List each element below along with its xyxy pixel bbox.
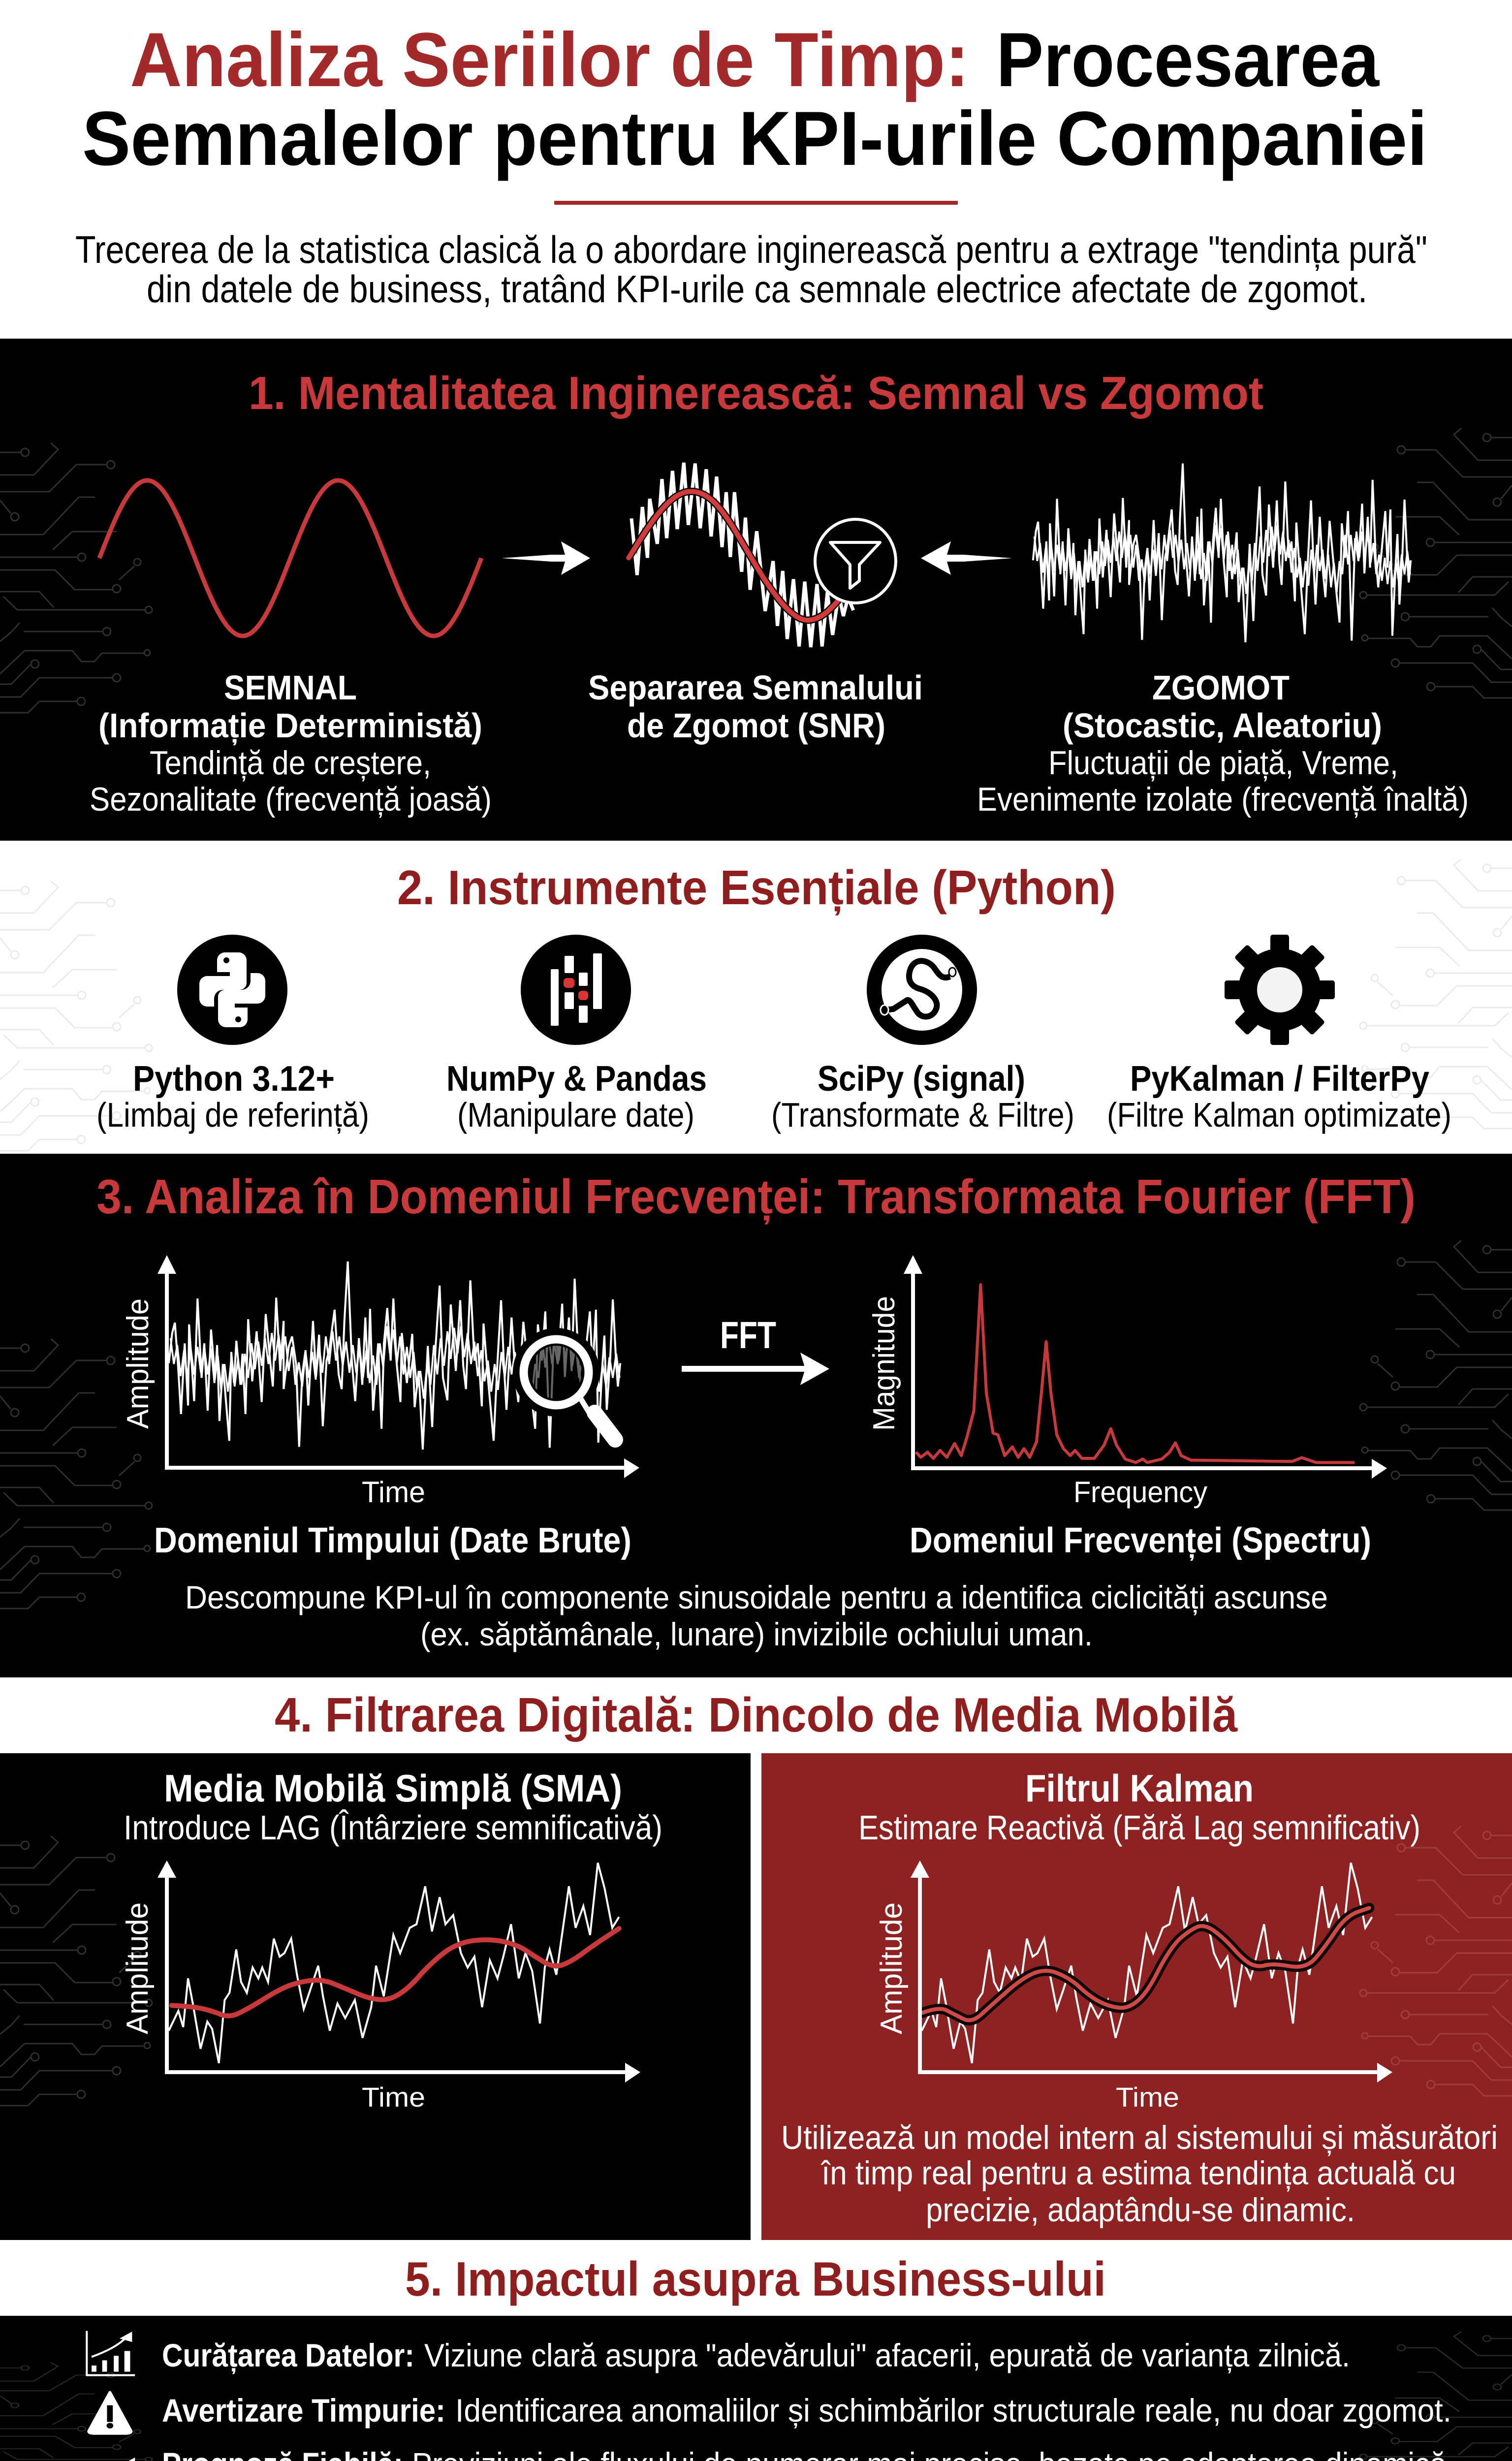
- text: noise description: (Stocastic, Aleatoriu): [1063, 706, 1382, 745]
- text: time domain caption: Domeniul Timpului (Date Brute): [154, 1521, 631, 1560]
- panel: section 2 tools: [0, 841, 1512, 1154]
- icon: warning triangle: [89, 2393, 131, 2433]
- row: data cleaning: Curățarea Datelor:: [162, 2337, 414, 2374]
- heading: section 1: 1. Mentalitatea Inginerească: Semnal vs Zgomot: [249, 367, 1263, 419]
- title: Analiza Seriilor de Timp:: [130, 17, 969, 103]
- title: [82, 17, 1427, 182]
- row: early warning: Avertizare Timpurie:: [162, 2392, 445, 2429]
- panel: section 5 business impact: [0, 2316, 1512, 2461]
- chart: time domain: Time: [362, 1476, 425, 1509]
- text: noise description: [977, 668, 1469, 818]
- chart: Kalman: [875, 1861, 1392, 2113]
- arrow: noise to separation: [921, 541, 1012, 575]
- label: SciPy: [771, 1059, 1074, 1134]
- row: data cleaning: [87, 2331, 1350, 2375]
- text: signal description: [90, 668, 492, 818]
- icon: filter funnel: [815, 519, 896, 603]
- arrow: signal to separation: [502, 541, 590, 575]
- label: Python: (Limbaj de referință): [96, 1096, 369, 1134]
- text: signal description: Sezonalitate (frecvență joasă): [90, 781, 492, 818]
- heading: section 3: 3. Analiza în Domeniul Frecvenței: Transformata Fourier (FFT): [96, 1169, 1416, 1225]
- chart: pure signal sine wave: [99, 480, 481, 636]
- text: noise description: Evenimente izolate (frecvență înaltă): [977, 781, 1469, 818]
- icon: Python logo: [177, 935, 287, 1045]
- text: FFT description: [185, 1579, 1328, 1652]
- text: separation label: de Zgomot (SNR): [627, 706, 885, 745]
- icon: gear: [1225, 935, 1335, 1045]
- text: signal description: Tendință de creștere,: [150, 744, 431, 782]
- text: frequency domain caption: Domeniul Frecvenței (Spectru): [910, 1521, 1371, 1561]
- icon: NumPy and Pandas: [521, 935, 631, 1045]
- chart: SMA: [121, 1861, 640, 2113]
- text: separation label: [588, 668, 923, 745]
- row: early warning: Identificarea anomaliilor și schimbărilor structurale reale, nu doar zgomot.: [455, 2392, 1451, 2429]
- chart: time domain: [121, 1255, 639, 1509]
- text: separation label: Separarea Semnalului: [588, 668, 923, 707]
- text: Kalman description: [781, 2119, 1498, 2229]
- subtitle: [75, 228, 1427, 311]
- chart: Kalman: Amplitude: [875, 1902, 909, 2034]
- chart: frequency spectrum: Frequency: [1073, 1476, 1207, 1509]
- icon: magnifying glass: [522, 1337, 615, 1440]
- text: FFT description: Descompune KPI-ul în componente sinusoidale pentru a identifica ciclicități ascunse: [185, 1579, 1328, 1615]
- text: Kalman title: [858, 1767, 1420, 1847]
- title rule: [554, 201, 958, 205]
- title: Procesarea: [996, 17, 1380, 103]
- text: signal description: SEMNAL: [224, 668, 357, 707]
- chart: noisy signal with extracted sine and filter: [629, 463, 896, 647]
- text: SMA title: Media Mobilă Simplă (SMA): [164, 1767, 622, 1810]
- chart: Kalman: Time: [1116, 2082, 1179, 2113]
- subtitle: din datele de business, tratând KPI-urile ca semnale electrice afectate de zgomot.: [147, 267, 1367, 311]
- chart: frequency spectrum: [867, 1255, 1387, 1509]
- label: NumPy: [446, 1059, 707, 1134]
- row: early warning: [89, 2392, 1451, 2433]
- row: data cleaning: Viziune clară asupra "adevărului" afacerii, epurată de varianța zilnică.: [424, 2337, 1350, 2373]
- label: Python: Python 3.12+: [133, 1059, 335, 1099]
- label: Python: [96, 1059, 369, 1134]
- label: Kalman: [1107, 1059, 1451, 1134]
- chart: SMA: Amplitude: [121, 1902, 155, 2034]
- chart: time domain: Amplitude: [121, 1298, 155, 1429]
- panel: Kalman filter: [761, 1753, 1512, 2240]
- label: Kalman: (Filtre Kalman optimizate): [1107, 1096, 1451, 1134]
- icon: chart with rising line: [87, 2331, 135, 2375]
- chart: frequency spectrum: Magnitude: [867, 1296, 901, 1431]
- text: Kalman title: Filtrul Kalman: [1025, 1767, 1254, 1810]
- panel: section 3 FFT: [0, 1154, 1512, 1677]
- text: Kalman description: precizie, adaptându-se dinamic.: [926, 2191, 1355, 2229]
- header: title and intro: [0, 0, 1512, 339]
- label: SciPy: SciPy (signal): [818, 1059, 1025, 1099]
- arrow: FFT: FFT: [720, 1314, 776, 1357]
- text: SMA title: Introduce LAG (Întârziere semnificativă): [124, 1808, 662, 1847]
- chart: SMA: Time: [362, 2082, 425, 2113]
- icon: SciPy: [867, 935, 977, 1045]
- label: NumPy: (Manipulare date): [457, 1096, 694, 1134]
- icon: forecast chart: [87, 2458, 135, 2461]
- heading: section 4: 4. Filtrarea Digitală: Dincolo de Media Mobilă: [275, 1688, 1238, 1742]
- label: Kalman: PyKalman / FilterPy: [1130, 1059, 1429, 1099]
- text: noise description: Fluctuații de piață, Vreme,: [1048, 744, 1398, 782]
- text: Kalman description: în timp real pentru a estima tendința actuală cu: [820, 2154, 1456, 2192]
- arrow: FFT: [682, 1314, 829, 1385]
- label: SciPy: (Transformate & Filtre): [771, 1096, 1074, 1134]
- heading: section 5: 5. Impactul asupra Business-ului: [405, 2252, 1106, 2306]
- text: noise description: ZGOMOT: [1152, 668, 1290, 707]
- text: signal description: (Informație Deterministă): [98, 706, 482, 745]
- tool labels: [96, 1059, 1451, 1134]
- text: Kalman title: Estimare Reactivă (Fără Lag semnificativ): [858, 1808, 1420, 1847]
- heading: section 2: 2. Instrumente Esențiale (Python): [397, 860, 1116, 915]
- label: NumPy: NumPy & Pandas: [446, 1059, 707, 1099]
- panel: section 1 signal vs noise: [0, 339, 1512, 841]
- panel: simple moving average: [0, 1753, 751, 2240]
- text: FFT description: (ex. săptămânale, lunare) invizibile ochiului uman.: [420, 1616, 1093, 1652]
- chart: pure noise: [1033, 464, 1411, 642]
- title: Semnalelor pentru KPI-urile Companiei: [82, 96, 1427, 182]
- text: SMA title: [124, 1767, 662, 1847]
